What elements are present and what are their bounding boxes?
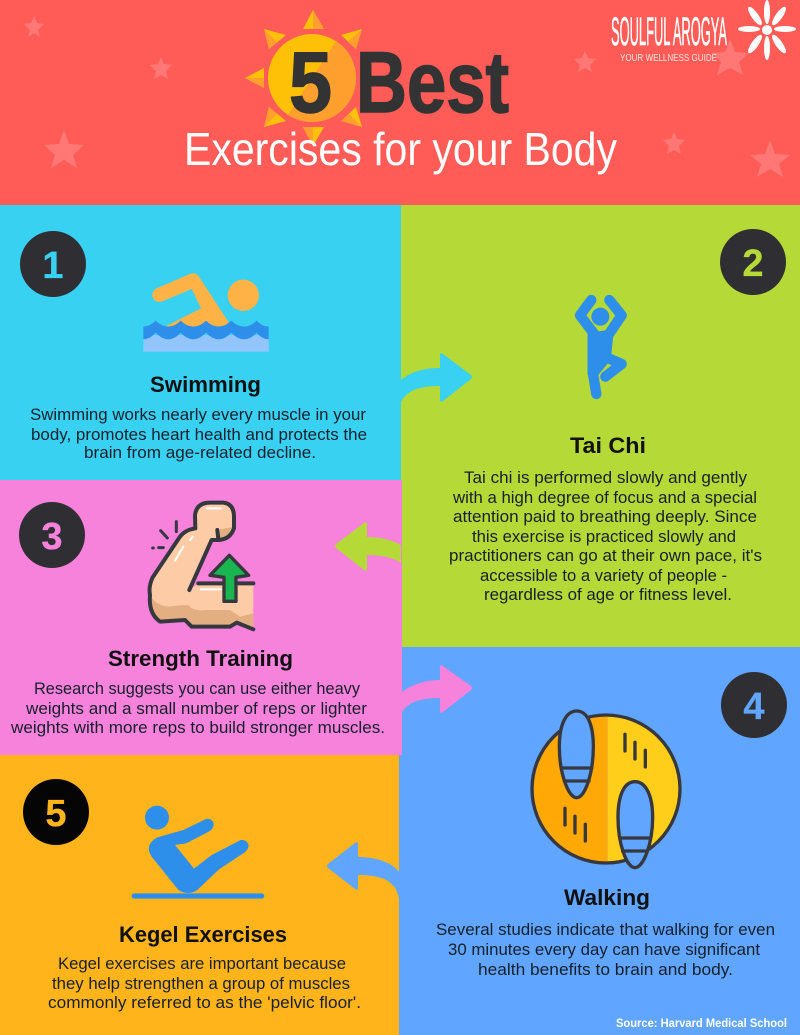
background stars (24, 16, 790, 177)
text: swimming description: brain from age-related decline. (84, 444, 316, 462)
heading: Kegel Exercises: Kegel Exercises (119, 922, 287, 947)
badge: 5 (23, 779, 89, 845)
arrow: tai chi to strength training (335, 522, 401, 571)
text: tai chi description: this exercise is practiced slowly and (472, 528, 736, 546)
icon: sun (245, 10, 362, 146)
icon: flexed arm (150, 503, 253, 629)
logo: Soulful Arogya: YOUR WELLNESS GUIDE (620, 53, 717, 64)
panel: strength training (0, 480, 402, 755)
logo: Soulful Arogya (611, 0, 796, 64)
arrow: strength training to walking (402, 665, 472, 713)
icon: flower (738, 0, 796, 60)
heading: Walking: Walking (564, 885, 650, 910)
text: tai chi description (449, 469, 762, 604)
text: kegel description (48, 955, 361, 1012)
arrow: swimming to tai chi (401, 353, 472, 402)
text: tai chi description: Tai chi is performed slowly and gently (464, 469, 748, 487)
badge: 5: 5 (45, 793, 67, 835)
text: tai chi description: practitioners can go at their own pace, it's (449, 547, 762, 565)
source credit: Source: Harvard Medical School (616, 1016, 787, 1030)
text: tai chi description: with a high degree of focus and a special (452, 489, 757, 507)
badge: 2 (720, 229, 786, 295)
icon: tai chi figure (580, 300, 622, 394)
text: walking description: Several studies indicate that walking for even (436, 921, 775, 939)
icon: footprints (532, 711, 682, 868)
text: kegel description: commonly referred to as the 'pelvic floor'. (48, 994, 361, 1012)
text: swimming description: body, promotes heart health and protects the (31, 426, 367, 444)
text: walking description: 30 minutes every day can have significant (448, 941, 760, 959)
title: 5 Best: 5 (289, 35, 332, 131)
badge: 4 (721, 672, 787, 738)
panel: tai chi (401, 205, 800, 647)
badge: 3 (19, 502, 85, 568)
text: strength training description (10, 680, 385, 737)
heading: Tai Chi: Tai Chi (570, 433, 646, 458)
badge: 1: 1 (42, 245, 64, 287)
badge: 4: 4 (743, 686, 765, 728)
heading: Swimming: Swimming (150, 372, 261, 397)
panel: walking (399, 647, 800, 1035)
badge: 2: 2 (742, 243, 764, 285)
subtitle: Exercises for your Body (184, 123, 617, 175)
title: 5 Best: Best (356, 35, 509, 131)
text: walking description: health benefits to brain and body. (478, 961, 733, 979)
text: kegel description: Kegel exercises are important because (58, 955, 346, 973)
text: walking description (436, 921, 775, 979)
arrow: walking to kegel exercises (327, 842, 399, 900)
panel: header (0, 0, 800, 206)
text: strength training description: weights with more reps to build stronger muscles. (10, 719, 385, 737)
badge: 3: 3 (41, 516, 63, 558)
text: swimming description (30, 406, 367, 462)
text: kegel description: they help strengthen a group of muscles (52, 975, 350, 993)
heading: Strength Training: Strength Training (108, 646, 293, 671)
title: 5 Best (289, 35, 509, 131)
text: tai chi description: accessible to a variety of people - (480, 567, 727, 585)
text: strength training description: Research suggests you can use either heavy (34, 680, 361, 698)
text: tai chi description: regardless of age or fitness level. (484, 586, 732, 604)
panel: swimming (0, 205, 401, 480)
icon: swimmer (143, 273, 269, 352)
text: swimming description: Swimming works nearly every muscle in your (30, 406, 367, 424)
icon: sit-up figure (132, 806, 264, 899)
panel: kegel exercises (0, 755, 399, 1035)
text: strength training description: weights and a small number of reps or lighter (25, 700, 368, 718)
badge: 1 (20, 231, 86, 297)
text: tai chi description: attention paid to breathing deeply. Since (453, 508, 757, 526)
